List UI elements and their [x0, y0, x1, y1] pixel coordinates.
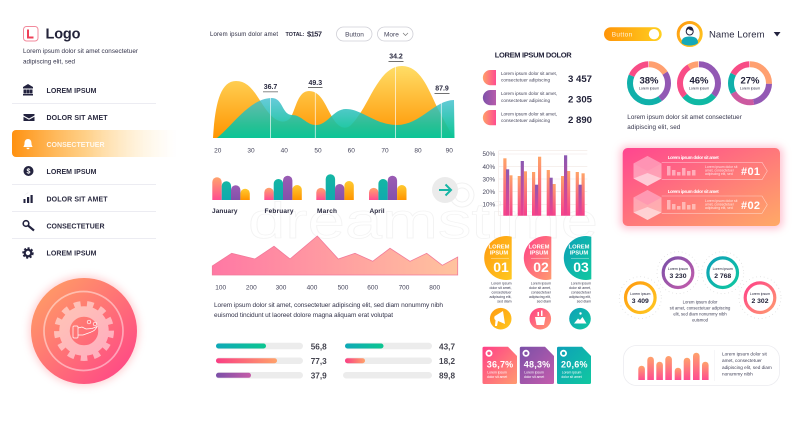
x axis labels: 50	[314, 148, 322, 154]
x axis labels: 500	[338, 284, 349, 292]
stat list heading: LOREM IPSUM DOLOR	[495, 50, 572, 60]
sidebar navigation	[12, 84, 176, 258]
card 36,7%: 36,7%	[487, 360, 513, 370]
value 49.3: 49.3	[308, 80, 322, 87]
mini bar text: Lorem ipsum dolor sit	[722, 352, 768, 356]
button pill: Button	[345, 32, 364, 38]
teal series	[217, 98, 454, 138]
April bars	[369, 176, 406, 215]
icon: magnifier	[23, 221, 34, 230]
nav label: CONSECTETUER	[46, 224, 104, 230]
step 03 text: sed diam	[577, 300, 591, 304]
dropdown arrow	[774, 32, 780, 36]
ring 2 768	[702, 252, 744, 294]
active nav highlight	[12, 130, 176, 157]
card 48,3%: dolor sit amet	[524, 375, 544, 379]
ring 3 409: Lorem ipsum	[630, 292, 650, 296]
card 20,6%	[557, 347, 591, 384]
stat row 3	[483, 110, 592, 126]
stat row 2	[483, 90, 593, 106]
nav label: DOLOR SIT AMET	[46, 115, 108, 122]
stat row 1: consectetuer adipiscing	[501, 78, 550, 82]
bar 18,2	[345, 357, 455, 366]
rank 02: #02	[741, 200, 760, 212]
more dropdown pill: More	[384, 32, 399, 38]
card 48,3%: Lorem ipsum	[524, 370, 544, 374]
x axis labels: 300	[276, 284, 287, 292]
ring 3 230: Lorem ipsum	[668, 267, 688, 271]
step 03 text: consectetuer	[571, 290, 592, 294]
x axis labels: 30	[247, 148, 255, 154]
step 01: IPSUM	[490, 250, 508, 256]
card 36,7%	[482, 347, 517, 384]
nav label: LOREM IPSUM	[46, 88, 97, 95]
rank 02: Lorem ipsum dolor sit	[705, 199, 737, 203]
rank 02	[634, 189, 767, 220]
x axis labels: 400	[307, 284, 318, 292]
icon: dollar: $	[27, 168, 31, 176]
ring 2 768: Lorem ipsum	[713, 267, 733, 271]
y axis labels: 30%	[482, 176, 496, 183]
step 01 text: sed diam	[497, 300, 512, 304]
logo description: Lorem ipsum dolor sit amet consectetuer	[23, 48, 138, 55]
step 01 text: Lorem ipsum	[491, 282, 512, 286]
icon: cup	[530, 308, 551, 330]
icon: megaphone	[490, 308, 512, 330]
stat list	[483, 50, 593, 126]
step 01 text: adipiscing elit,	[490, 295, 512, 299]
stat row 1	[483, 70, 592, 85]
icon: avatar	[678, 22, 701, 46]
icon: hand with coins	[73, 320, 97, 338]
x axis labels	[215, 284, 441, 292]
bar 77,3: 77,3	[311, 357, 327, 366]
stat row 2: Lorem ipsum dolor sit amet,	[501, 91, 557, 96]
step 01	[484, 236, 512, 280]
step 02 text: adipiscing elit,	[529, 295, 551, 299]
arrow button	[432, 177, 458, 203]
icon: growth bars	[24, 192, 33, 203]
x axis labels: 60	[348, 148, 355, 154]
nav label: DOLOR SIT AMET	[46, 196, 108, 204]
rank 02: adipiscing elit, sed	[705, 206, 733, 210]
step 02	[524, 236, 551, 280]
February bars: February	[264, 208, 294, 215]
donut 46%	[680, 64, 718, 102]
step 02: LOREM	[529, 244, 550, 250]
x axis labels: 200	[246, 284, 257, 292]
step 02: IPSUM	[530, 250, 548, 256]
x axis labels: 40	[281, 148, 288, 154]
bar 43,7	[345, 342, 455, 352]
orange bars	[503, 157, 585, 216]
x axis labels: 80	[414, 148, 422, 154]
y axis labels: 20%	[482, 189, 496, 196]
mini bar text: adipiscing elit, sed diam	[722, 365, 772, 370]
icon: mail	[24, 114, 34, 121]
ring caption: elit, sed diam nonummy nibh	[673, 312, 727, 316]
step 03: 03	[573, 259, 589, 275]
ring 3 230: 3 230	[669, 273, 687, 280]
stat row 3: consectetuer adipiscing	[501, 118, 550, 123]
total label: TOTAL:	[286, 32, 305, 38]
value 34.2: 34.2	[389, 54, 403, 60]
watermark: dreamstime	[248, 193, 598, 249]
paragraph: Lorem ipsum dolor sit amet, consectetuer adipiscing elit, sed diam nonummy nibh	[214, 302, 443, 309]
value 87.9: 87.9	[435, 86, 449, 92]
ring 3 230	[657, 252, 699, 294]
mini bar text: amet, consectetuer	[722, 358, 762, 363]
x axis labels: 20	[214, 148, 222, 154]
ring 3 409: 3 409	[632, 298, 649, 305]
user name: Name Lorem	[709, 30, 765, 40]
step 03 text: dolor sit amet,	[569, 286, 591, 290]
March bars: March	[317, 208, 337, 215]
step 03: LOREM	[569, 244, 590, 250]
value 36.7: 36.7	[264, 84, 277, 91]
stat row 1: Lorem ipsum dolor sit amet,	[501, 71, 557, 76]
marker lines	[270, 61, 441, 138]
ring caption: Lorem ipsum dolor	[683, 300, 718, 304]
button pill	[336, 27, 372, 41]
ring 2 302: Lorem ipsum	[750, 292, 770, 296]
donut 46%: 46%	[689, 76, 709, 86]
donut 27%: 27%	[740, 76, 760, 86]
rank 01: #01	[741, 166, 760, 178]
orange series	[213, 66, 454, 138]
stat row 2: consectetuer adipiscing	[501, 98, 550, 103]
y axis labels	[482, 151, 496, 209]
mini bars	[638, 353, 709, 380]
step 02: 02	[533, 259, 549, 275]
nav label: CONSECTETUER	[46, 142, 104, 149]
monthly bar groups	[212, 174, 406, 215]
y axis labels: 10%	[482, 202, 496, 209]
area chart	[213, 54, 454, 154]
January bars: January	[212, 208, 238, 215]
mini bar card	[624, 346, 780, 386]
mini bar text: nonummy nibh	[722, 372, 753, 376]
step 03 text: adipiscing elit,	[569, 295, 591, 299]
card 36,7%: Lorem ipsum	[487, 370, 507, 374]
icon: bell	[24, 139, 32, 149]
icon: landscape	[569, 308, 591, 330]
card 20,6%: 20,6%	[561, 360, 588, 370]
step 03: IPSUM	[570, 250, 588, 256]
y axis labels: 50%	[482, 151, 496, 158]
rank 01	[634, 155, 767, 186]
rank 02: Lorem ipsum dolor sit amet	[668, 189, 719, 194]
ring 2 768: 2 768	[714, 273, 731, 280]
donut caption: Lorem ipsum dolor sit amet consectetuer	[627, 114, 742, 121]
percent cards	[482, 347, 591, 384]
ring 3 409	[619, 277, 661, 319]
toggle button	[604, 27, 662, 41]
stat row 3: Lorem ipsum dolor sit amet,	[501, 112, 557, 116]
rank 01: adipiscing elit, sed	[705, 172, 733, 176]
ring 2 302	[739, 277, 781, 319]
chart caption: Lorem ipsum dolor amet	[210, 32, 278, 38]
rank 02: amet, consectetuer	[705, 202, 735, 206]
stat row 1: 3 457	[568, 74, 592, 85]
donut 38%	[630, 64, 668, 102]
step 02 text: sed diam	[537, 300, 551, 304]
nav label: LOREM IPSUM	[46, 250, 97, 258]
bar 56,8	[216, 342, 327, 352]
icon: bank	[23, 84, 33, 96]
y axis labels: 40%	[482, 164, 496, 171]
x axis labels: 600	[367, 284, 379, 292]
x axis labels: 70	[381, 148, 389, 154]
bar 37,9	[216, 372, 327, 381]
donut 38%: 38%	[639, 76, 659, 86]
paragraph: euismod tincidunt ut laoreet dolore magna aliquam erat volutpat	[214, 312, 393, 319]
bar 37,9: 37,9	[311, 372, 327, 381]
bar 77,3	[216, 357, 327, 366]
April bars: April	[370, 208, 385, 215]
donut 46%: Lorem ipsum	[689, 86, 709, 90]
January bars	[212, 177, 250, 215]
user profile	[678, 22, 780, 46]
March bars	[316, 174, 354, 215]
x axis labels: 90	[446, 148, 453, 154]
step 01 text: dolor sit amet,	[490, 286, 512, 290]
pink area chart	[212, 236, 458, 292]
icon: cog	[23, 248, 33, 258]
donut 27%: Lorem ipsum	[740, 86, 760, 90]
chart header	[210, 27, 413, 41]
logo description: adipiscing elit, sed	[23, 58, 75, 66]
ring 2 302: 2 302	[751, 298, 769, 305]
ranked panel	[620, 146, 783, 229]
step 02 text: consectetuer	[531, 290, 552, 294]
step 02 text: Lorem ipsum	[531, 282, 551, 286]
donut 38%: Lorem ipsum	[639, 86, 659, 90]
step 01 text: consectetuer	[491, 290, 512, 294]
card 36,7%: dolor sit amet	[487, 375, 507, 379]
icon: dollar	[24, 166, 34, 176]
bar 56,8: 56,8	[311, 342, 327, 352]
nav label: LOREM IPSUM	[46, 169, 97, 176]
x axis labels	[214, 148, 453, 154]
logo wordmark: Logo	[46, 26, 81, 42]
percent bar chart	[482, 151, 587, 216]
ring stats	[619, 252, 781, 322]
purple bars	[506, 155, 582, 216]
progress bars	[216, 342, 455, 381]
x axis labels: 800	[429, 284, 441, 292]
stat row 2: 2 305	[568, 94, 593, 106]
step 03 text: Lorem ipsum	[571, 282, 591, 286]
card 20,6%: dolor sit amet	[561, 375, 582, 379]
x axis labels: 100	[215, 284, 227, 292]
February bars	[264, 176, 302, 215]
bar 43,7: 43,7	[439, 342, 455, 352]
ring caption: sit amet, consectetuer adipiscing	[670, 306, 731, 310]
ring caption: euismod	[692, 318, 709, 322]
logo header	[23, 26, 138, 66]
step 02 text: dolor sit amet,	[529, 286, 551, 290]
value 89,8: 89,8	[439, 372, 455, 381]
total value: $157	[307, 30, 322, 38]
rank 01: Lorem ipsum dolor sit	[705, 165, 737, 169]
x axis labels: 700	[399, 284, 410, 292]
card 48,3%	[520, 347, 554, 384]
step 01: LOREM	[489, 244, 510, 250]
icon: logo badge	[24, 26, 38, 41]
rank 01: amet, consectetuer	[705, 168, 735, 172]
step 03	[564, 236, 591, 280]
numbered steps	[484, 236, 592, 304]
toggle button: Button	[612, 32, 633, 38]
stat row 3: 2 890	[568, 115, 592, 126]
watermark	[248, 183, 598, 249]
gear badge	[29, 276, 139, 386]
donut 27%	[731, 64, 769, 102]
step 01: 01	[493, 259, 509, 275]
donut caption: adipiscing elit, sed	[627, 124, 681, 131]
bar 18,2: 18,2	[439, 357, 455, 366]
card 48,3%: 48,3%	[524, 360, 550, 370]
card 20,6%: Lorem ipsum	[562, 370, 581, 374]
rank 01: Lorem ipsum dolor sit amet	[668, 155, 719, 160]
more dropdown pill	[378, 27, 413, 41]
